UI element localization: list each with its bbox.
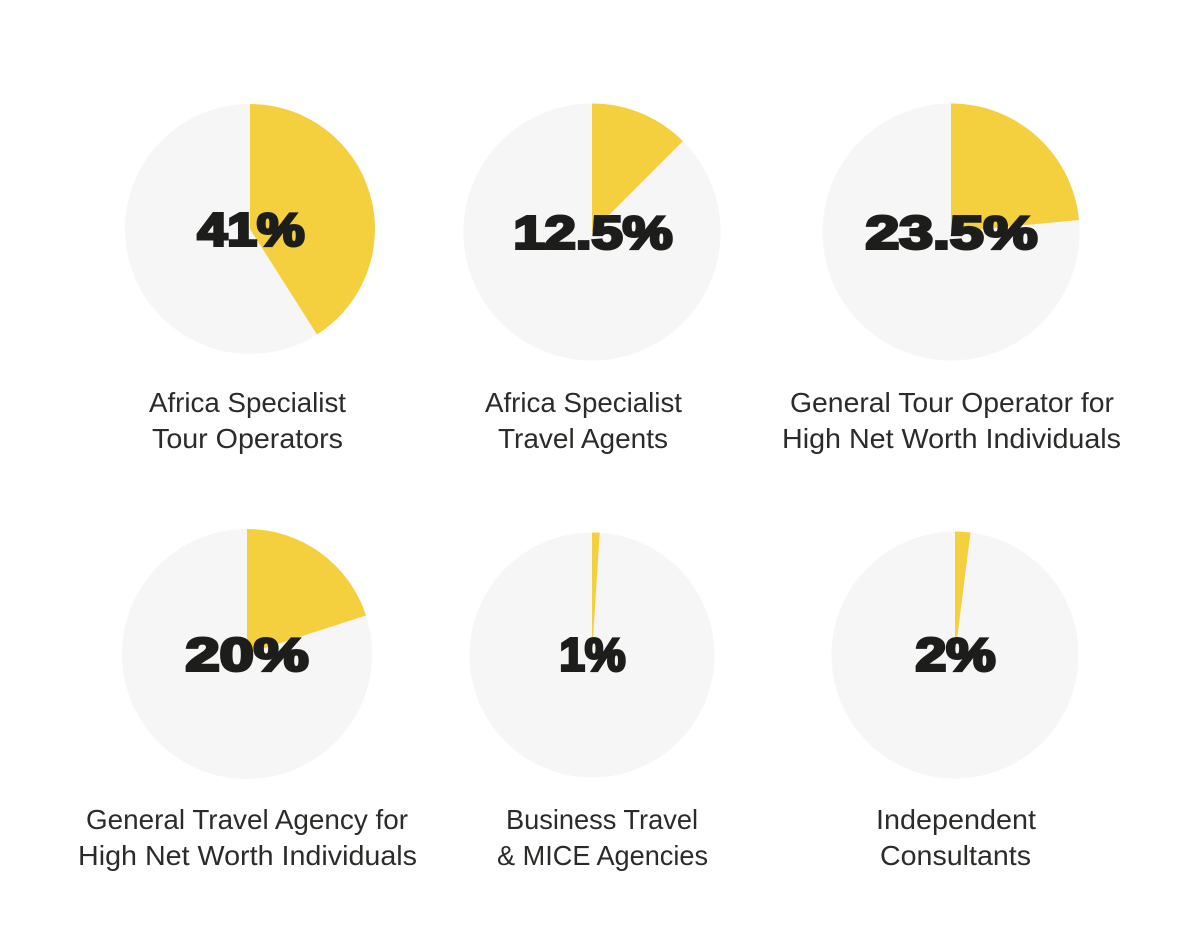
label: Independent Consultants: Independent <box>876 804 1036 835</box>
label: Africa Specialist Travel Agents: Africa Specialist <box>485 387 682 418</box>
label: Africa Specialist Tour Operators <box>149 387 346 454</box>
pie: Africa Specialist Tour Operators 41% <box>125 104 375 354</box>
pie: Africa Specialist Travel Agents 12.5%: 12.5% <box>514 206 672 258</box>
label: General Tour Operator for High Net Worth Individuals <box>782 387 1121 454</box>
pie: Independent Consultants 2% <box>832 532 1078 778</box>
label: Africa Specialist Travel Agents: Travel Agents <box>498 423 668 454</box>
pie: General Tour Operator for High Net Worth Individuals 23.5% <box>822 103 1080 360</box>
label: Africa Specialist Tour Operators: Africa Specialist <box>149 387 346 418</box>
pie: General Travel Agency for High Net Worth Individuals 20% <box>122 529 372 779</box>
label: General Travel Agency for High Net Worth Individuals: General Travel Agency for <box>86 804 408 835</box>
pie: Africa Specialist Tour Operators 41%: 41% <box>198 204 304 256</box>
label: Africa Specialist Tour Operators: Tour Operators <box>152 423 343 454</box>
label: Business Travel and MICE Agencies <box>497 804 708 871</box>
label: Business Travel and MICE Agencies: Business Travel <box>506 804 698 835</box>
label: Independent Consultants: Consultants <box>880 840 1031 871</box>
label: General Travel Agency for High Net Worth Individuals: High Net Worth Individuals <box>78 840 417 871</box>
label: Africa Specialist Travel Agents <box>485 387 682 454</box>
label: Independent Consultants <box>876 804 1036 871</box>
pie: General Travel Agency for High Net Worth Individuals 20%: 20% <box>186 628 308 680</box>
pie: Independent Consultants 2%: 2% <box>916 628 996 680</box>
pie: Business Travel and MICE Agencies 1%: 1% <box>560 628 626 680</box>
label: General Travel Agency for High Net Worth Individuals <box>78 804 417 871</box>
pie: Business Travel and MICE Agencies 1% <box>470 532 714 778</box>
label: General Tour Operator for High Net Worth Individuals: General Tour Operator for <box>790 387 1114 418</box>
label: General Tour Operator for High Net Worth Individuals: High Net Worth Individuals <box>782 423 1121 454</box>
pie: General Tour Operator for High Net Worth Individuals 23.5%: 23.5% <box>866 206 1038 258</box>
label: Business Travel and MICE Agencies: & MICE Agencies <box>497 840 708 871</box>
pie: Africa Specialist Travel Agents 12.5% <box>464 103 720 361</box>
